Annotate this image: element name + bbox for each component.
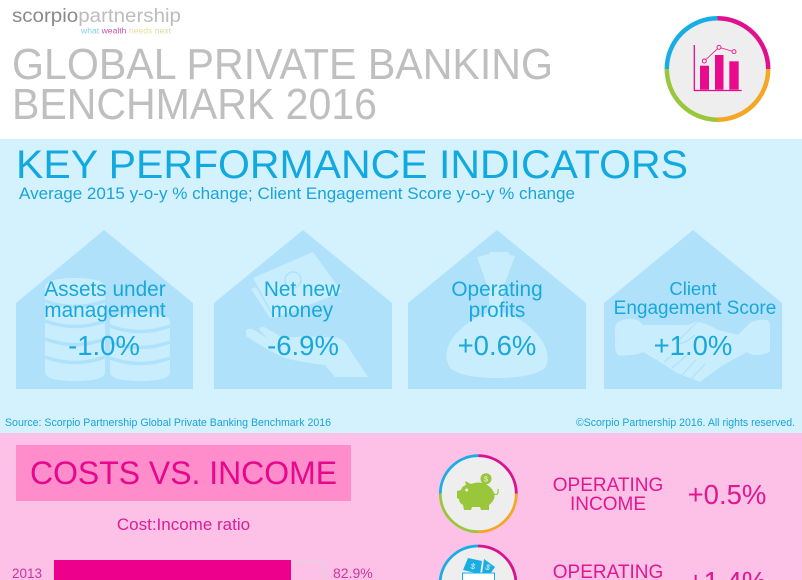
card: client engagement score <box>604 230 782 389</box>
heading block: costs vs income <box>16 445 351 501</box>
card: operating profits <box>408 230 586 389</box>
heading: key performance indicators: KEY PERFORMANCE INDICATORS <box>16 143 688 187</box>
icon: wallet with banknotes: $ <box>470 562 477 572</box>
panel: costs vs income <box>0 433 802 580</box>
card: net new money: money <box>271 299 334 322</box>
card: assets under management <box>16 230 193 389</box>
icon: handshake <box>615 319 770 382</box>
logo: what wealth needs next <box>80 26 172 36</box>
label: operating income: INCOME <box>570 494 646 515</box>
card: net new money: Net new <box>264 278 341 301</box>
icon: piggy bank <box>440 456 516 532</box>
card: assets under management: management <box>44 299 166 322</box>
panel: key performance indicators <box>0 139 802 433</box>
chart title: Cost:Income ratio <box>117 515 250 534</box>
card: assets under management: Assets under <box>44 278 166 301</box>
card: operating profits: Operating <box>451 278 543 301</box>
card: operating profits: +0.6% <box>458 330 536 361</box>
label: operating income: OPERATING <box>553 475 663 496</box>
bar chart: 2013 row <box>12 560 373 580</box>
card: client engagement score: +1.0% <box>654 330 732 361</box>
icon: piggy bank: $ <box>484 474 489 484</box>
icon: wallet with banknotes <box>440 546 516 580</box>
icon: bar chart in ring <box>666 18 768 120</box>
subheading: Average 2015 y-o-y % change; Client Engagement Score y-o-y % change <box>19 185 575 203</box>
logo <box>12 5 181 36</box>
card: operating profits: profits <box>469 299 525 322</box>
card: assets under management: -1.0% <box>68 330 140 361</box>
card: net new money: -6.9% <box>267 330 339 361</box>
icon: banknote over hand <box>246 252 368 377</box>
copyright note: ©Scorpio Partnership 2016. All rights reserved. <box>576 417 795 429</box>
card: client engagement score: Engagement Score <box>614 298 776 319</box>
icon: coin stacks <box>45 278 170 381</box>
icon: wallet with banknotes: $ <box>484 562 492 573</box>
heading block: costs vs income: COSTS VS. INCOME <box>30 455 337 491</box>
title <box>12 41 553 129</box>
icon: money bag <box>446 252 548 378</box>
value: operating income: +0.5% <box>688 479 766 510</box>
label: operating income <box>553 475 663 515</box>
source note: Source: Scorpio Partnership Global Private Banking Benchmark 2016 <box>5 417 331 429</box>
title: GLOBAL PRIVATE BANKING <box>12 41 553 89</box>
logo: scorpiopartnership <box>12 5 181 27</box>
title: BENCHMARK 2016 <box>12 81 377 129</box>
card: net new money <box>214 230 392 389</box>
card: client engagement score: Client <box>669 278 717 299</box>
